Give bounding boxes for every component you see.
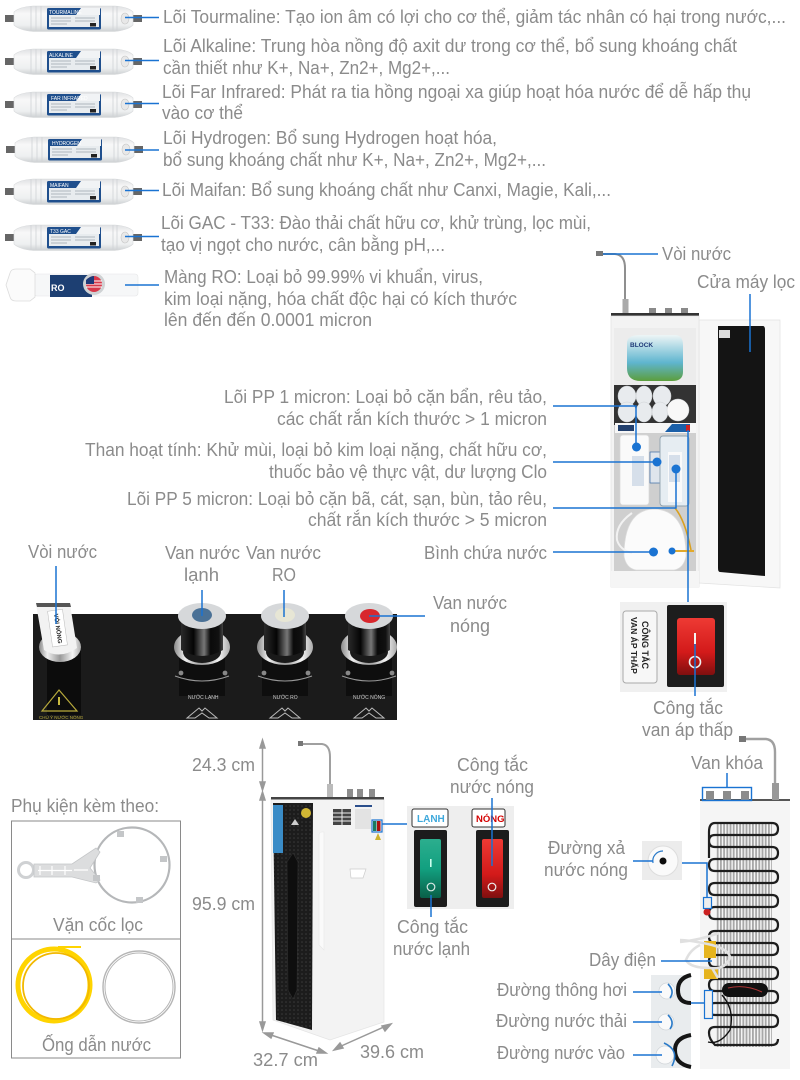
- cartridge: Hydrogen: [6, 137, 159, 162]
- low-pressure switch: VAN ÁP THẤP: [629, 617, 639, 674]
- power cord: [680, 933, 730, 978]
- shutoff valves: [702, 773, 752, 800]
- text: Hydrogen: [163, 128, 546, 170]
- label: hot drain: [544, 838, 628, 880]
- accessories frame: [12, 821, 180, 1058]
- hot drain callout: [633, 861, 712, 908]
- faucet: [596, 251, 628, 313]
- heading: Phụ kiện kèm theo:: [11, 796, 159, 816]
- dimension arrows: [260, 740, 391, 1053]
- text: GAC: tạo vị ngọt cho nước, cân bằng pH,...: [161, 234, 445, 255]
- label: waste line: Đường nước thải: [496, 1011, 627, 1031]
- hot valve: [341, 603, 397, 718]
- label: cold switch: [393, 916, 470, 959]
- text: Far Infrared: [162, 81, 751, 123]
- ports callout: [633, 990, 712, 1055]
- label: faucet height: 24.3 cm: [192, 755, 255, 775]
- hot valve: NƯỚC NÓNG: [353, 694, 385, 701]
- cartridge: GAC T33: T33 GAC: [50, 229, 71, 235]
- cartridge: Far Infrared: FAR INFRARED: [51, 96, 88, 102]
- label: PP 1 micron: các chất rắn kích thước > 1 micron: [277, 408, 547, 429]
- label: cold valve: lạnh: [184, 565, 219, 585]
- label: hot drain: nước nóng: [544, 860, 628, 880]
- condenser coil: [709, 823, 778, 1045]
- mini switches callout: [372, 820, 407, 832]
- mounting bar: [615, 423, 696, 433]
- text: Tourmaline: Lõi Tourmaline: Tạo ion âm có lợi cho cơ thể, giảm tác nhân có hại trong nước,...: [163, 7, 786, 27]
- RO valve: NƯỚC RO: [273, 694, 298, 701]
- text: Maifan: Lõi Maifan: Bổ sung khoáng chất như Canxi, Magie, Kali,...: [162, 180, 611, 200]
- icon: filter wrench: [18, 828, 170, 903]
- cartridge: Far Infrared: [5, 92, 159, 118]
- label: hot switch: Công tắc: [457, 754, 528, 775]
- faucet: [298, 741, 333, 797]
- compressor strap: [708, 983, 768, 1042]
- membrane housings: [618, 386, 689, 422]
- icon: yellow tube coil: [18, 947, 90, 1021]
- dimension labels: [192, 755, 424, 1070]
- water tank: [611, 508, 699, 587]
- label: hot valve: [433, 593, 507, 636]
- cartridge: Alkaline: [5, 49, 159, 74]
- label: hot valve: Van nước: [433, 593, 507, 613]
- label: hot switch: nước nóng: [450, 777, 534, 797]
- label: inlet line: Đường nước vào: [497, 1043, 625, 1063]
- filter cartridges list: [5, 6, 159, 301]
- valve panel: [33, 566, 425, 720]
- text: RO membrane: [164, 267, 517, 330]
- door: [699, 320, 780, 588]
- rear panel: [700, 799, 790, 1069]
- cold valve: [174, 603, 230, 718]
- label: tank: Bình chứa nước: [424, 543, 547, 563]
- label: PP 5 micron: chất rắn kích thước > 5 micron: [308, 509, 547, 530]
- cold valve: NƯỚC LẠNH: [188, 694, 219, 701]
- cabinet: [611, 316, 699, 587]
- callout lines: [56, 566, 425, 624]
- cartridge: RO membrane: RO: [51, 283, 64, 293]
- power cord callout: [661, 960, 712, 962]
- text: Alkaline: cần thiết như K+, Na+, Zn2+, Mg2+,...: [163, 58, 450, 78]
- low-pressure switch: CÔNG TẮC: [640, 621, 651, 669]
- cartridge: Tourmaline: [5, 6, 159, 32]
- text: Hydrogen: Lõi Hydrogen: Bổ sung Hydrogen hoạt hóa,: [163, 128, 497, 148]
- label: power cord: Dây điện: [589, 950, 656, 970]
- label: RO valve: Van nước: [246, 543, 321, 563]
- closed purifier with dimensions: [260, 740, 407, 1053]
- text: RO membrane: Màng RO: Loại bỏ 99.99% vi khuẩn, virus,: [164, 267, 483, 287]
- cabinet: BLOCK: [630, 342, 653, 349]
- label: PP 5 micron: Lõi PP 5 micron: Loại bỏ cặn bã, cát, sạn, bùn, tảo rêu,: [127, 489, 547, 509]
- valves: [347, 789, 375, 797]
- ports inset: [651, 975, 691, 1068]
- hot drain inset: [642, 841, 682, 880]
- label: RO valve: [246, 543, 321, 585]
- label: shutoff valves: Van khóa: [691, 753, 764, 773]
- cartridge: Maifan: MAIFAN: [50, 183, 69, 189]
- vent and label: [333, 805, 381, 840]
- label: RO valve: RO: [272, 565, 296, 585]
- label: low-pressure switch: Công tắc: [653, 697, 723, 718]
- rear labels: [496, 753, 764, 1063]
- label: vent line: Đường thông hơi: [497, 980, 627, 1000]
- rear of purifier: [633, 736, 790, 1069]
- cartridge descriptions: [161, 7, 786, 330]
- valve labels: [28, 542, 507, 636]
- cold switch: LẠNH: [417, 814, 445, 825]
- text: RO membrane: kim loại nặng, hóa chất độc hại có kích thước: [164, 289, 517, 309]
- cartridge: GAC T33: [5, 225, 159, 250]
- hot switch: NÓNG: [476, 813, 504, 825]
- cartridge: Alkaline: ALKALINE: [49, 53, 74, 59]
- text: GAC: [161, 213, 591, 255]
- label: faucet: Vòi nước: [28, 542, 97, 562]
- label: PP 5 micron: [127, 489, 547, 530]
- text: Alkaline: Lõi Alkaline: Trung hòa nồng độ axit dư trong cơ thể, bổ sung khoáng chất: [163, 36, 737, 56]
- label: wrench: Vặn cốc lọc: [53, 915, 143, 935]
- label: PP 1 micron: [224, 387, 547, 429]
- label: activated carbon: thuốc bảo vệ thực vật, dư lượng Clo: [269, 462, 547, 482]
- text: Alkaline: [163, 36, 737, 78]
- cartridge: Tourmaline: TOURMALINE: [49, 10, 82, 16]
- label: width: 32.7 cm: [253, 1050, 318, 1070]
- label: cold valve: [165, 543, 240, 585]
- label: body height: 95.9 cm: [192, 894, 255, 914]
- top knobs: [611, 308, 699, 316]
- faucet valve: VỎI NÓNG: [52, 613, 64, 644]
- accessories: [11, 796, 180, 1058]
- cartridge: Maifan: [5, 179, 159, 204]
- filter canisters: [620, 435, 689, 506]
- cartridge: Hydrogen: HYDROGEN: [52, 141, 81, 147]
- label: activated carbon: Than hoạt tính: Khử mùi, loại bỏ kim loại nặng, chất hữu cơ,: [85, 440, 547, 460]
- text: Hydrogen: bổ sung khoáng chất như K+, Na+, Zn2+, Mg2+,...: [163, 150, 546, 170]
- label: tubes: Ống dẫn nước: [42, 1034, 151, 1055]
- label: hot switch: [450, 754, 534, 797]
- icon: white tube coil: [103, 951, 175, 1023]
- text: Far Infrared: vào cơ thể: [162, 103, 243, 123]
- low-pressure switch: [620, 602, 727, 696]
- RO valve: [257, 603, 313, 718]
- front black panel: [273, 803, 313, 1030]
- faucet valve: [36, 603, 84, 720]
- warning stickers: [704, 908, 718, 979]
- cartridge: RO membrane: [6, 269, 159, 301]
- text: RO membrane: lên đến đến 0.0001 micron: [164, 310, 372, 330]
- label: faucet: Vòi nước: [662, 244, 731, 264]
- text: GAC: Lõi GAC - T33: Đào thải chất hữu cơ, khử trùng, lọc mùi,: [161, 213, 591, 233]
- label: cold valve: Van nước: [165, 543, 240, 563]
- text: Far Infrared: Lõi Far Infrared: Phát ra tia hồng ngoại xa giúp hoạt hóa nước để dễ hấp thụ: [162, 81, 751, 102]
- label: low-pressure switch: [642, 697, 733, 740]
- label: activated carbon: [85, 440, 547, 482]
- label: cold switch: nước lạnh: [393, 939, 470, 959]
- faucet valve: CHÚ Ý NƯỚC NÓNG: [39, 714, 84, 720]
- label: depth: 39.6 cm: [360, 1042, 424, 1062]
- hot and cold switches: [407, 798, 514, 917]
- purifier labels: [85, 244, 795, 563]
- label: door: Cửa máy lọc: [697, 272, 795, 292]
- label: cold switch: Công tắc: [397, 916, 468, 937]
- callout lines: [553, 254, 750, 602]
- faucet: [739, 736, 779, 800]
- label: hot valve: nóng: [450, 616, 490, 636]
- open purifier illustration: [553, 251, 780, 602]
- label: low-pressure switch: van áp thấp: [642, 720, 733, 740]
- label: PP 1 micron: Lõi PP 1 micron: Loại bỏ cặn bẩn, rêu tảo,: [224, 387, 547, 407]
- label: hot drain: Đường xả: [548, 838, 626, 858]
- cabinet body: [271, 797, 384, 1040]
- callout lines: [431, 798, 492, 917]
